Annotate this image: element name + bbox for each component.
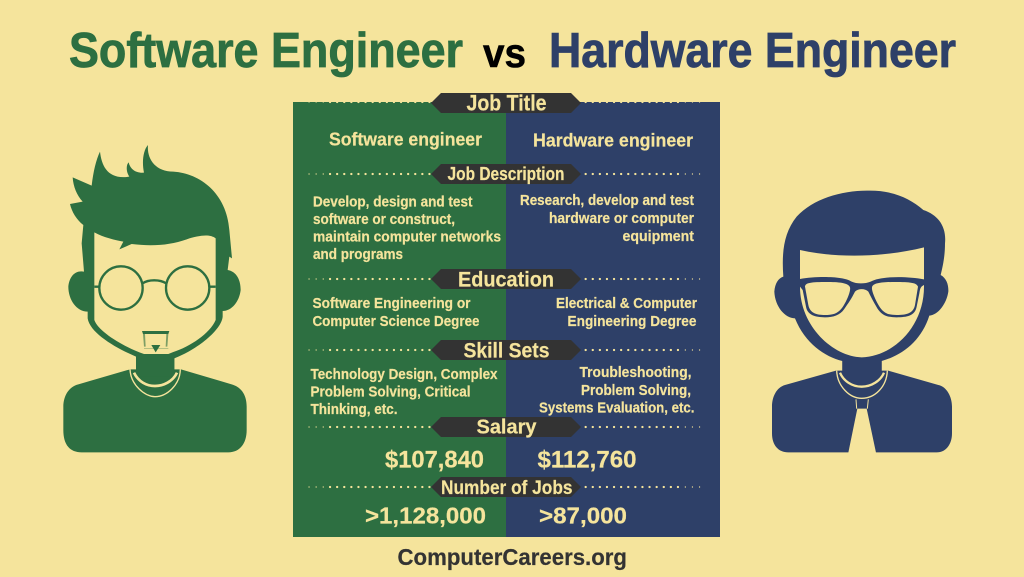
row: skill sets: Thinking, etc. xyxy=(310,402,398,418)
title: Hardware Engineer xyxy=(549,24,956,78)
row: education: Computer Science Degree xyxy=(312,314,480,330)
footer source: ComputerCareers.org xyxy=(398,544,627,570)
row: number of jobs: >1,128,000 xyxy=(365,502,486,528)
row: skill sets: Technology Design, Complex xyxy=(310,367,498,383)
panel: software column xyxy=(293,102,506,537)
icon: software engineer avatar xyxy=(63,145,247,452)
panel: hardware column xyxy=(506,102,720,537)
panel: comparison table xyxy=(293,90,720,537)
row: salary: $107,840 xyxy=(385,446,484,474)
row: education xyxy=(309,268,706,330)
row: salary: $112,760 xyxy=(538,446,636,474)
row: job title: Software engineer xyxy=(329,130,482,150)
row: job description: Research, develop and test xyxy=(520,193,694,209)
row: skill sets: Troubleshooting, xyxy=(580,365,692,381)
row: skill sets: Skill Sets xyxy=(464,340,550,362)
row: number of jobs: >87,000 xyxy=(539,502,627,528)
title xyxy=(69,24,956,78)
title: vs xyxy=(483,30,526,76)
row: education: Electrical & Computer xyxy=(556,296,697,312)
row: number of jobs: Number of Jobs xyxy=(441,478,572,499)
row: number of jobs xyxy=(309,477,706,528)
row: job description: Develop, design and test xyxy=(313,194,473,210)
row: education: Software Engineering or xyxy=(312,296,471,312)
row: job description: maintain computer networks xyxy=(313,230,501,246)
row: education: Engineering Degree xyxy=(568,314,696,330)
row: salary xyxy=(309,416,706,474)
row: job title: Hardware engineer xyxy=(533,130,693,150)
row: skill sets: Problem Solving, xyxy=(581,383,691,399)
icon: hardware engineer avatar xyxy=(772,191,952,453)
row: job description: equipment xyxy=(622,229,694,245)
row: skill sets xyxy=(309,340,706,418)
row: job description: software or construct, xyxy=(313,212,455,228)
row: job description: Job Description xyxy=(448,164,564,184)
title: Software Engineer xyxy=(69,24,463,78)
row: job title: Job Title xyxy=(466,90,546,116)
row: job title xyxy=(309,90,706,150)
row: skill sets: Problem Solving, Critical xyxy=(310,384,470,400)
row: job description xyxy=(309,164,706,263)
row: job description: and programs xyxy=(313,247,403,263)
row: education: Education xyxy=(458,268,554,292)
row: salary: Salary xyxy=(476,416,537,438)
row: skill sets: Systems Evaluation, etc. xyxy=(539,400,694,416)
row: job description: hardware or computer xyxy=(549,211,694,227)
